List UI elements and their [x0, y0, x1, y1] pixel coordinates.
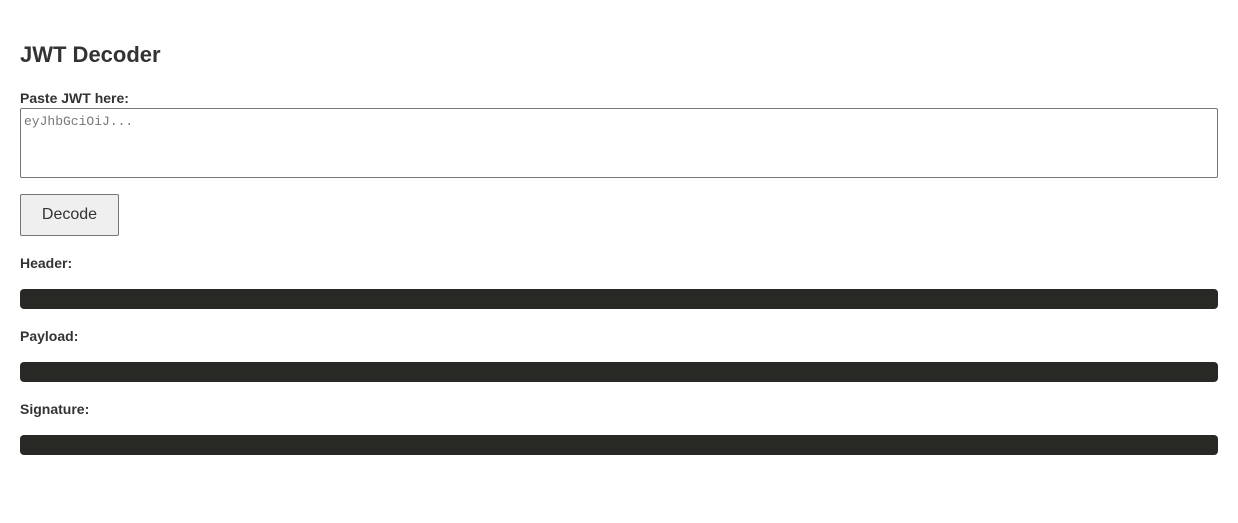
- output: payload: [20, 362, 1218, 382]
- label: payload: Payload:: [20, 328, 78, 344]
- button: decode: Decode: [42, 206, 97, 223]
- title: JWT Decoder: [20, 42, 161, 67]
- button: decode: [20, 194, 119, 236]
- output: header: [20, 289, 1218, 309]
- label: header: Header:: [20, 255, 72, 271]
- output: signature: [20, 435, 1218, 455]
- label: signature: Signature:: [20, 401, 89, 417]
- textarea: eyJhbGciOiJ...: [24, 114, 133, 129]
- textarea: [20, 108, 1218, 178]
- label: paste: Paste JWT here:: [20, 90, 129, 106]
